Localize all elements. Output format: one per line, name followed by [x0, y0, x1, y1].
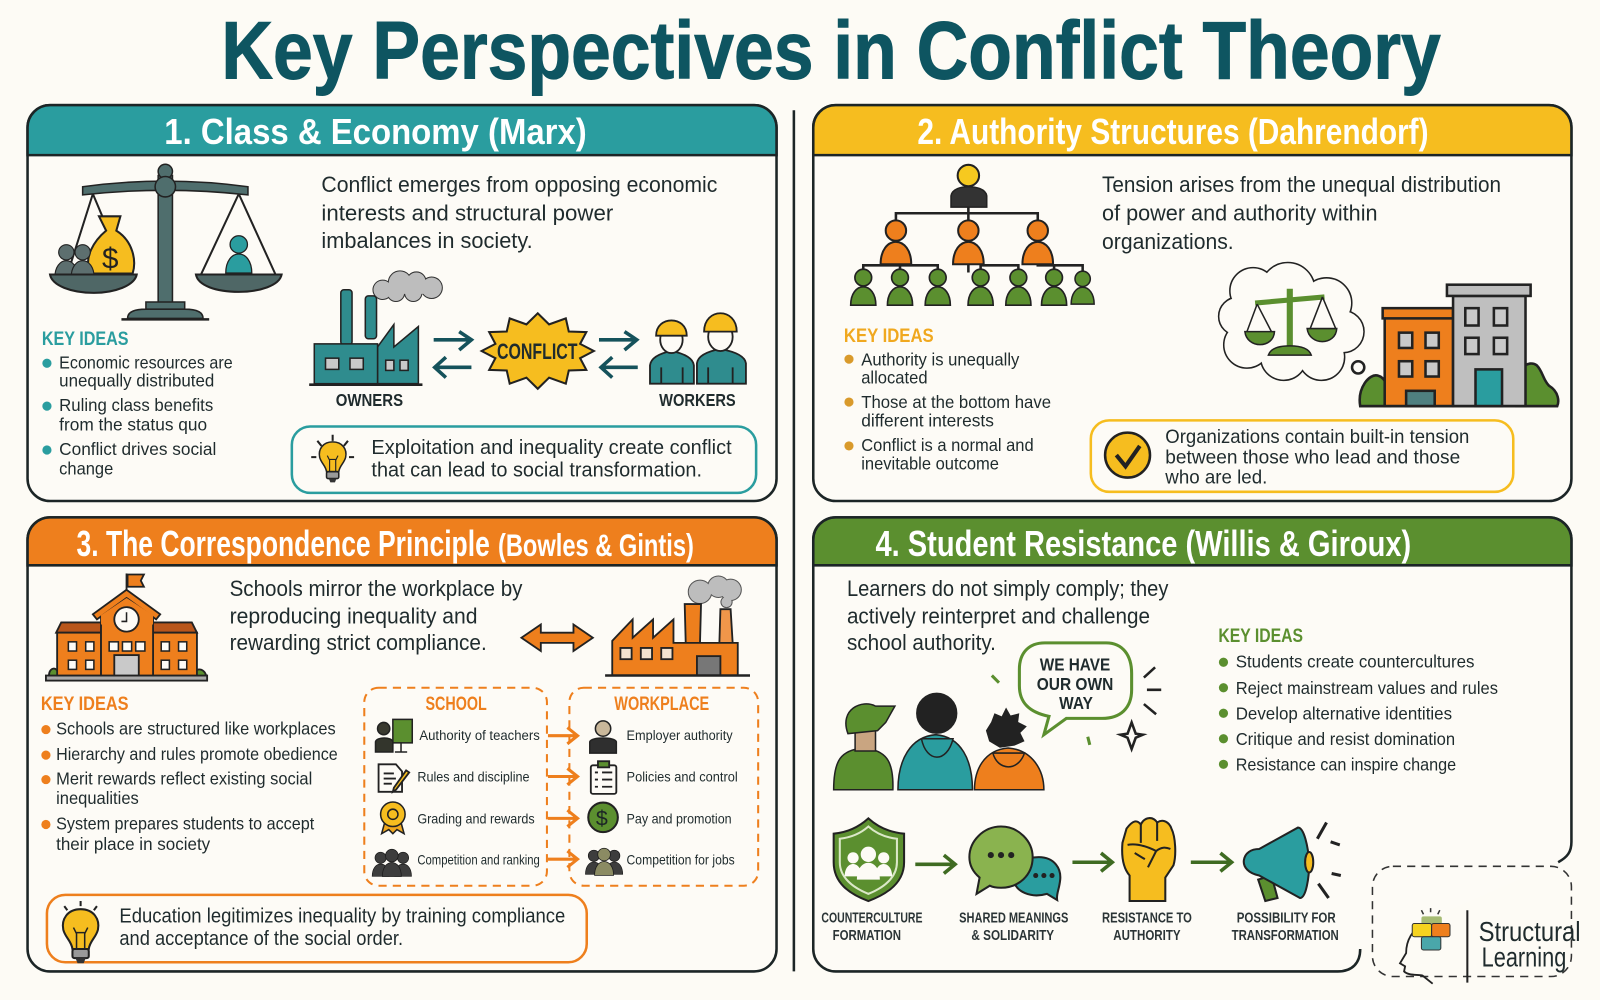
panel 1 description: interests and structural power	[321, 200, 614, 225]
panel 2 description: Tension arises from the unequal distribution	[1102, 172, 1501, 197]
panel 2 key ideas: inevitable outcome	[861, 453, 999, 473]
panel 4 heading: 4. Student Resistance (Willis & Giroux)	[876, 524, 1411, 564]
panel 2 description	[1102, 172, 1501, 254]
flow labels: COUNTERCULTURE	[821, 910, 923, 926]
logo: Structural Learning: Structural	[1479, 916, 1581, 947]
correspondence arrows	[548, 728, 578, 867]
arrows: workers to conflict	[599, 332, 638, 378]
panel 2 key ideas: Authority is unequally	[861, 349, 1020, 369]
panel 4 key ideas: Critique and resist domination	[1236, 729, 1455, 749]
school column: SCHOOL	[426, 693, 487, 715]
icon: conversation bubbles	[969, 827, 1060, 900]
icon: employer	[590, 721, 616, 753]
label: workers: WORKERS	[659, 390, 736, 410]
speech bubble: OUR OWN	[1037, 674, 1113, 694]
icon: shield	[834, 818, 904, 901]
panel 4 description: Learners do not simply comply; they	[847, 576, 1169, 601]
panel 3 description: rewarding strict compliance.	[230, 630, 487, 655]
icon: job competition group	[585, 848, 623, 875]
icon: clipboard	[591, 761, 616, 794]
students group	[834, 693, 1044, 790]
icon: office buildings	[1359, 285, 1558, 406]
panel 4 key ideas: KEY IDEAS	[1218, 625, 1303, 647]
workplace column: Competition for jobs	[627, 852, 735, 868]
icon: balance scale	[50, 164, 282, 319]
callout: legitimizes inequality: and acceptance of the social order.	[119, 928, 403, 950]
icon: rules document	[379, 764, 409, 792]
school column: Rules and discipline	[417, 770, 530, 786]
icon: teacher	[376, 719, 412, 752]
panel 4 description: school authority.	[847, 630, 996, 655]
panel 3 header band	[28, 517, 777, 565]
flow labels	[821, 910, 1339, 944]
panel 3 key ideas: inequalities	[56, 788, 139, 808]
flow arrow	[915, 855, 955, 873]
flow labels: SHARED MEANINGS	[959, 910, 1068, 926]
panel 4 key ideas: Resistance can inspire change	[1236, 754, 1456, 774]
panel 2 description: of power and authority within	[1102, 200, 1378, 225]
workplace column	[569, 688, 758, 886]
callout: exploitation	[292, 427, 756, 493]
workplace column: WORKPLACE	[614, 693, 709, 715]
panel 1 key ideas: Ruling class benefits	[59, 395, 214, 415]
panel 1 key ideas	[42, 328, 233, 478]
panel 2 key ideas: different interests	[861, 411, 994, 431]
panel 2 key ideas: Those at the bottom have	[861, 392, 1051, 412]
panel 1 key ideas: KEY IDEAS	[42, 328, 129, 350]
logo: Structural Learning: Learning	[1482, 941, 1566, 972]
icon: balance scale: $	[102, 242, 118, 275]
callout: exploitation: Exploitation and inequality create conflict	[371, 437, 732, 459]
panel 1 description: Conflict emerges from opposing economic	[321, 172, 717, 197]
panel 1 header band	[28, 105, 777, 155]
panel 4 description	[847, 576, 1169, 655]
panel 1 key ideas: unequally distributed	[59, 371, 214, 391]
icon: raised fist	[1122, 818, 1175, 901]
icon: dollar coin	[588, 803, 618, 832]
school column: Grading and rewards	[417, 811, 535, 827]
panel 2 header band	[813, 105, 1571, 155]
panel 3 key ideas: System prepares students to accept	[56, 814, 314, 834]
workplace column: Policies and control	[627, 770, 738, 786]
double arrow	[521, 624, 593, 651]
panel 3 heading: 3. The Correspondence Principle	[77, 524, 490, 564]
panel 4 key ideas: Develop alternative identities	[1236, 703, 1452, 723]
school column: Competition and ranking	[417, 852, 540, 868]
panel 2 heading: 2. Authority Structures (Dahrendorf)	[917, 112, 1429, 152]
panel 4 description: actively reinterpret and challenge	[847, 603, 1150, 628]
panel 3 description: reproducing inequality and	[230, 603, 478, 628]
panel 1 key ideas: change	[59, 458, 113, 478]
conflict starburst	[482, 313, 594, 389]
panel: class and economy	[28, 105, 777, 501]
panel 2 key ideas: Conflict is a normal and	[861, 435, 1034, 455]
panel: authority structures	[813, 105, 1571, 501]
icon: competition group	[372, 849, 411, 876]
callout: legitimizes inequality	[47, 895, 587, 963]
panel 3 key ideas: Merit rewards reflect existing social	[56, 769, 312, 789]
callout: built-in tension	[1091, 420, 1513, 492]
panel 4 header band	[813, 517, 1571, 565]
panel: correspondence principle	[28, 517, 777, 971]
arrows: owners to conflict	[434, 332, 471, 378]
speech bubble	[1019, 643, 1132, 735]
panel 2 key ideas: allocated	[861, 368, 928, 388]
flow labels: & SOLIDARITY	[971, 928, 1054, 944]
title: Key Perspectives in Conflict Theory	[221, 6, 1441, 97]
panel: student resistance	[813, 517, 1571, 971]
panel 1 description: imbalances in society.	[321, 228, 533, 253]
school column: Authority of teachers	[419, 728, 540, 744]
callout: exploitation: that can lead to social transformation.	[371, 460, 702, 482]
panel 2 key ideas	[844, 325, 1051, 473]
panel 2 description: organizations.	[1102, 229, 1234, 254]
callout: built-in tension: Organizations contain built-in tension	[1165, 426, 1469, 448]
speech bubble: WAY	[1059, 693, 1093, 713]
flow labels: POSSIBILITY FOR	[1237, 910, 1336, 926]
icon: workers	[650, 313, 746, 384]
workplace column: Employer authority	[627, 728, 733, 744]
workplace column: Pay and promotion	[627, 811, 732, 827]
accent marks and sparkle	[992, 667, 1161, 749]
panel 3 heading: (Bowles & Gintis)	[498, 527, 694, 563]
logo: Structural Learning	[1372, 866, 1581, 984]
flow labels: FORMATION	[833, 928, 901, 944]
panel 3 description	[230, 576, 523, 655]
panel 1 key ideas: Economic resources are	[59, 352, 233, 372]
panel 3 key ideas: Schools are structured like workplaces	[56, 719, 336, 739]
label: owners: OWNERS	[336, 390, 403, 410]
panel 1 key ideas: from the status quo	[59, 415, 207, 435]
icon: factory workplace	[605, 577, 750, 676]
panel 3 key ideas: their place in society	[56, 834, 211, 854]
panel 3 key ideas: Hierarchy and rules promote obedience	[56, 744, 338, 764]
flow labels: AUTHORITY	[1113, 928, 1181, 944]
icon: thought cloud with scales	[1219, 263, 1364, 380]
panel 4 key ideas: Students create countercultures	[1236, 651, 1475, 671]
icon: dollar coin: $	[596, 807, 608, 831]
panel 3 description: Schools mirror the workplace by	[230, 576, 523, 601]
org chart hierarchy	[851, 165, 1094, 305]
icon: school building	[46, 573, 207, 681]
callout: legitimizes inequality: Education legitimizes inequality by training compliance	[119, 905, 565, 927]
flow labels: RESISTANCE TO	[1102, 910, 1192, 926]
icon: megaphone	[1244, 822, 1341, 901]
icon: award ribbon	[381, 802, 405, 834]
callout: built-in tension: between those who lead and those	[1165, 446, 1460, 468]
callout: built-in tension: who are led.	[1164, 467, 1267, 489]
flow arrow	[1191, 853, 1232, 871]
panel 1 heading: 1. Class & Economy (Marx)	[164, 112, 587, 152]
panel 4 key ideas	[1218, 625, 1498, 774]
icon: factory owners	[309, 271, 442, 385]
school column	[364, 688, 547, 886]
panel 1 description	[321, 172, 717, 253]
speech bubble: WE HAVE	[1040, 654, 1110, 674]
panel 4 key ideas: Reject mainstream values and rules	[1236, 678, 1498, 698]
panel 3 key ideas: KEY IDEAS	[41, 693, 129, 715]
panel 2 key ideas: KEY IDEAS	[844, 325, 934, 347]
panel 3 key ideas	[41, 693, 338, 854]
flow arrow	[1072, 853, 1112, 871]
panel 1 key ideas: Conflict drives social	[59, 439, 216, 459]
flow labels: TRANSFORMATION	[1232, 928, 1339, 944]
conflict starburst: CONFLICT	[497, 339, 578, 364]
